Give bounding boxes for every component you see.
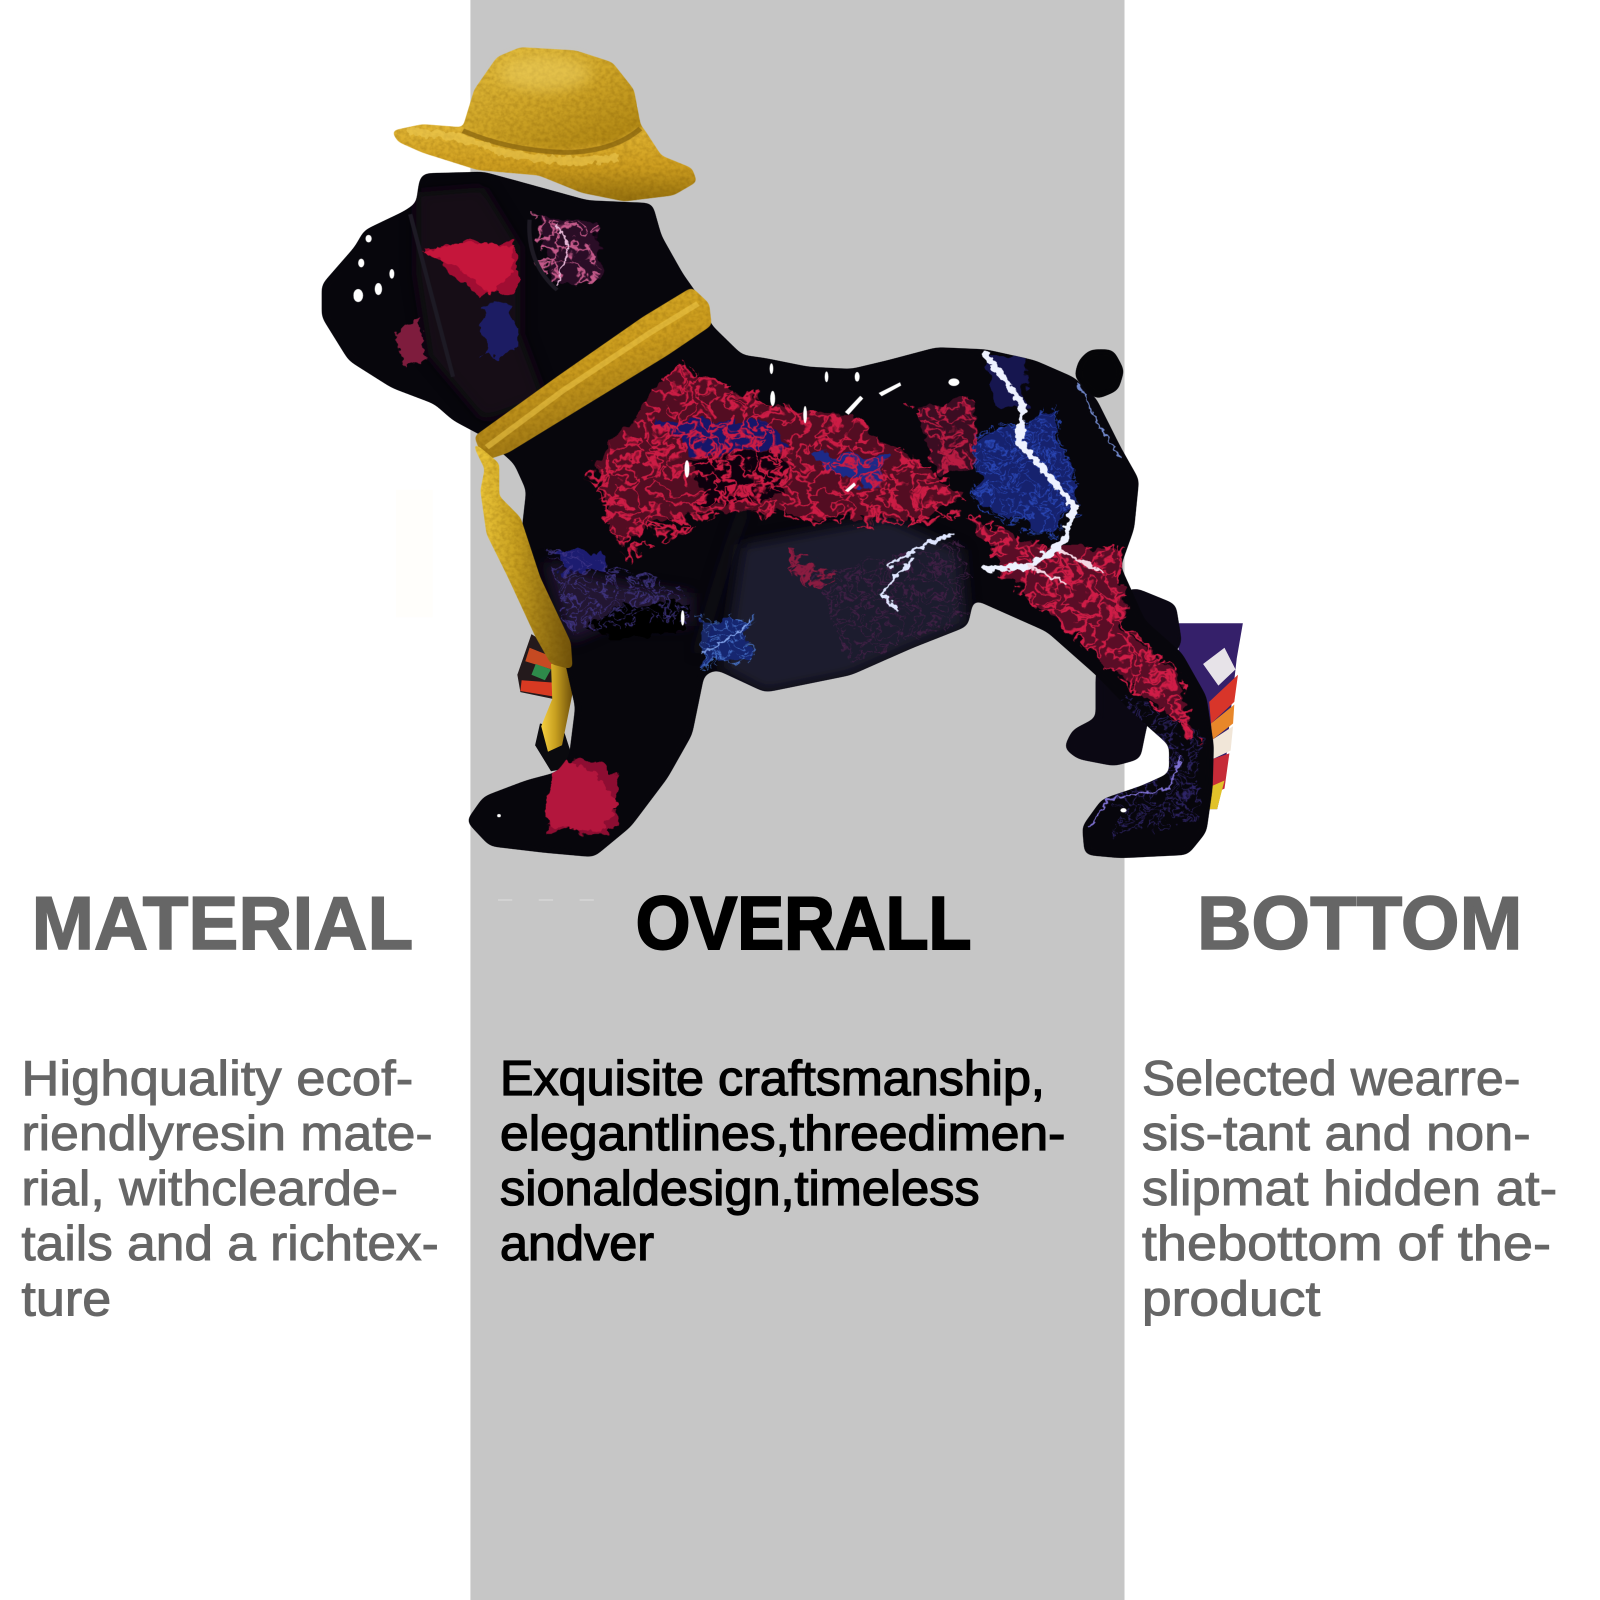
text block: bottom description xyxy=(1142,1052,1557,1326)
muzzle creases xyxy=(410,214,557,377)
gold hat xyxy=(392,47,697,201)
text block: material description: rial, withclearde- xyxy=(21,1162,398,1216)
gold necktie lower tail xyxy=(541,659,572,752)
colourful scrap behind tie xyxy=(517,634,571,699)
text block: overall description: sionaldesign,timeless xyxy=(500,1162,980,1216)
text block: overall description: elegantlines,threedimen- xyxy=(500,1107,1065,1161)
faint marks above overall heading xyxy=(498,899,612,901)
faint smudge left of the product xyxy=(396,490,433,617)
front leg crease xyxy=(698,510,744,653)
heading: bottom: BOTTOM xyxy=(1197,882,1522,966)
hat band shadow xyxy=(463,129,640,152)
dog body xyxy=(322,172,1213,858)
text block: material description xyxy=(21,1052,439,1326)
crimson veins xyxy=(533,214,1200,745)
text block: material description: riendlyresin mate- xyxy=(21,1107,433,1161)
white and blue lightning xyxy=(557,225,1182,826)
panel: bottom column xyxy=(1142,882,1557,1326)
far hind leg xyxy=(1064,588,1182,766)
panel: overall column text xyxy=(500,882,1065,1271)
panel: centre grey column xyxy=(470,0,1124,1600)
text block: bottom description: Selected wearre- xyxy=(1142,1052,1520,1106)
gloss highlights xyxy=(353,235,1127,817)
text block: material description: tails and a richtex- xyxy=(21,1217,439,1271)
text block: overall description: Exquisite craftsmanship, xyxy=(500,1052,1045,1106)
head sheen xyxy=(416,187,545,420)
heading: overall: OVERALL xyxy=(636,882,971,966)
secondary blue veins xyxy=(545,404,1200,837)
hat highlights xyxy=(499,56,591,91)
illustration: bulldog figurine with gold hat xyxy=(322,47,1243,858)
blue patches xyxy=(484,306,1078,664)
chest gloss patch xyxy=(588,604,692,637)
colourful backing scrap at rear leg xyxy=(1179,623,1243,809)
text block: bottom description: product xyxy=(1142,1272,1321,1326)
tail xyxy=(1074,350,1124,400)
heading: material: MATERIAL xyxy=(32,882,413,966)
text block: bottom description: thebottom of the- xyxy=(1142,1217,1551,1271)
crimson patches, dark base xyxy=(422,214,1194,832)
text block: material description: ture xyxy=(21,1272,111,1326)
text block: overall description xyxy=(500,1052,1065,1271)
panel: material column xyxy=(21,882,439,1326)
gold necktie upper xyxy=(470,439,572,669)
text block: material description: Highquality ecof- xyxy=(21,1052,413,1106)
text block: bottom description: sis-tant and non- xyxy=(1142,1107,1531,1161)
text block: overall description: andver xyxy=(500,1217,654,1271)
belly haze xyxy=(722,518,967,692)
text block: bottom description: slipmat hidden at- xyxy=(1142,1162,1557,1216)
far front paw xyxy=(535,724,576,771)
gold collar xyxy=(474,287,711,461)
